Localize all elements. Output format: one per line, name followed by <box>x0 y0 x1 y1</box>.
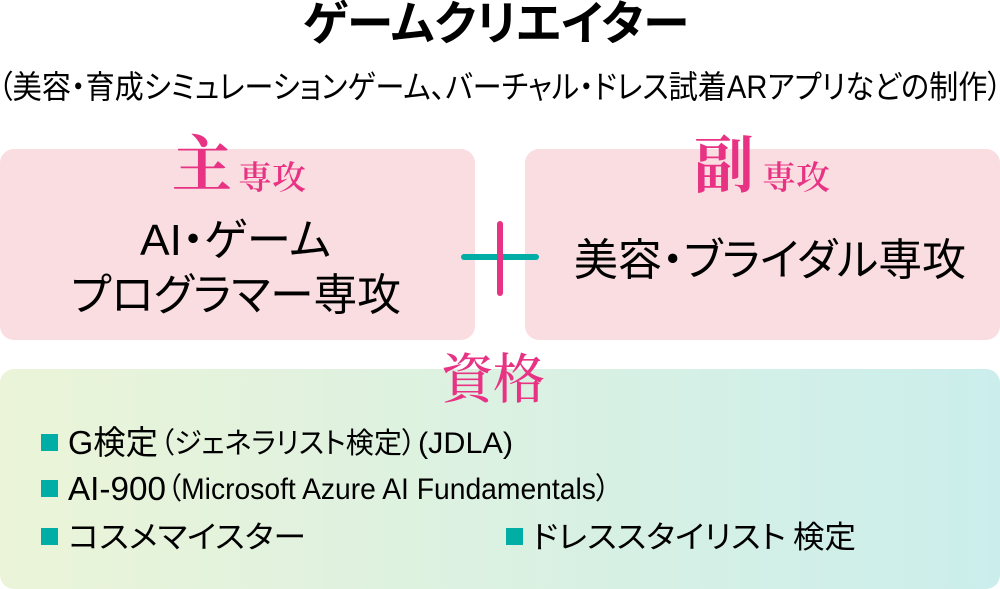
qualification: ドレススタイリスト検定: 検定 <box>793 520 856 555</box>
qualification: ドレススタイリスト検定: ドレススタイリスト <box>532 520 786 555</box>
major name: プログラマー専攻 <box>71 271 401 320</box>
qualification: AI-900: AI-900 <box>68 470 166 507</box>
icon: plus <box>461 221 539 296</box>
qualification: AI-900: （Microsoft Azure AI Fundamentals） <box>167 473 610 506</box>
major heading: 専攻 <box>238 160 306 197</box>
qualification: AI-900 <box>41 470 610 507</box>
qualifications heading: 資格 <box>441 350 545 410</box>
minor heading <box>694 133 830 201</box>
panel: major <box>0 132 475 340</box>
qualification: G検定: (JDLA) <box>418 427 513 460</box>
qualification: コスメマイスター: コスメマイスター <box>68 520 306 555</box>
major name <box>71 216 401 320</box>
qualification: ドレススタイリスト検定 <box>506 520 856 555</box>
minor heading: 専攻 <box>762 160 830 197</box>
panel: qualifications <box>0 350 1000 589</box>
qualification: G検定: （ジェネラリスト検定） <box>160 427 416 460</box>
qualification: G検定: G検定 <box>68 424 158 461</box>
qualification: G検定 <box>41 424 513 461</box>
major name: AI・ゲーム <box>140 216 331 265</box>
major heading: 主 <box>172 132 232 200</box>
major heading <box>172 132 306 200</box>
panel: minor <box>525 133 1000 340</box>
minor heading: 副 <box>694 133 754 201</box>
minor name: 美容・ブライダル専攻 <box>574 236 966 285</box>
